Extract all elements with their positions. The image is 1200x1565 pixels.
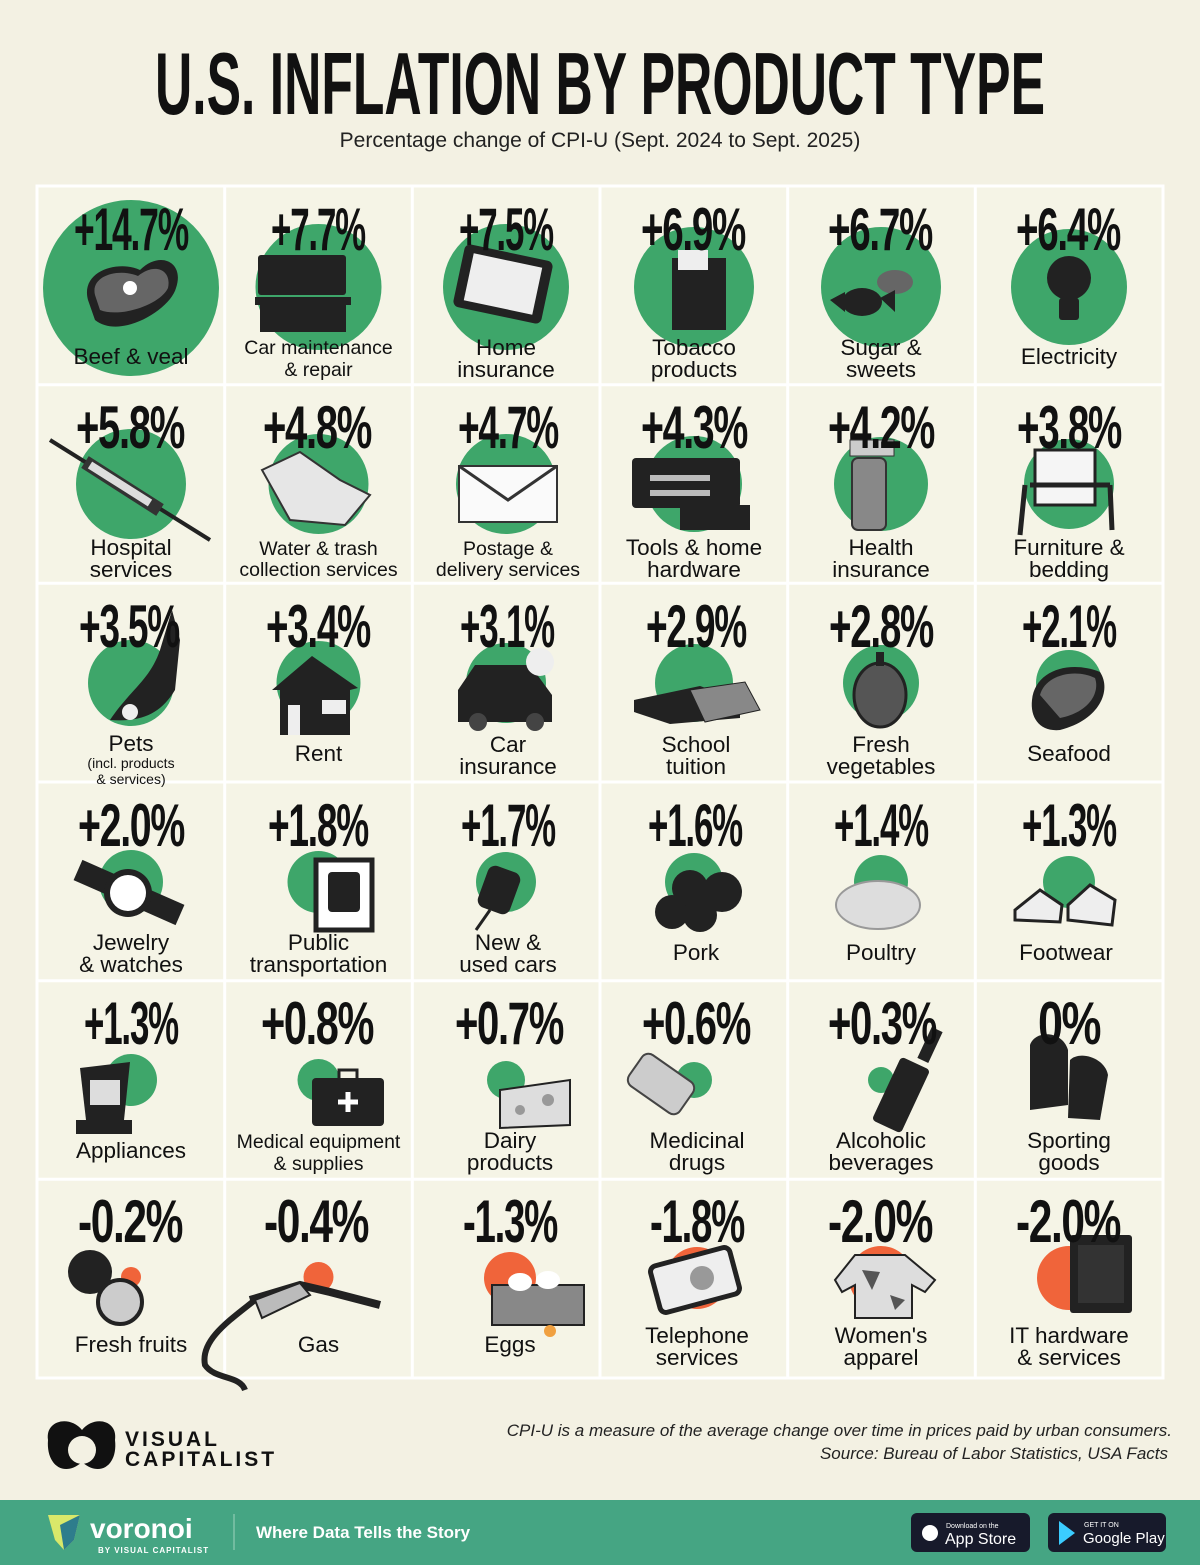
cell: beef & veal: Beef & veal — [73, 344, 189, 369]
logo: visual capitalist: CAPITALIST — [125, 1448, 277, 1471]
footer bar — [0, 1500, 1200, 1565]
cell: new & used cars: +1.7% — [461, 792, 555, 859]
cell: fresh fruits — [68, 1188, 187, 1357]
cell: fresh fruits: Fresh fruits — [75, 1332, 187, 1357]
cell: postage: +4.7% — [458, 394, 558, 461]
cell: pork: +1.6% — [648, 792, 742, 859]
footer bar: GET IT ON — [1084, 1522, 1119, 1529]
cell: alcoholic beverages: Alcoholic — [836, 1128, 926, 1153]
cell: jewelry: +2.0% — [78, 792, 184, 859]
footer bar: Where Data Tells the Story — [256, 1523, 471, 1542]
cell: dairy: Dairy — [484, 1128, 537, 1153]
cell: alcoholic beverages: +0.3% — [828, 990, 936, 1057]
cell: tobacco: +6.9% — [641, 196, 745, 263]
footer bar: Google Play — [1083, 1530, 1165, 1547]
cell: women's apparel — [828, 1188, 935, 1370]
cell: medical equipment — [237, 990, 401, 1175]
cell: public transportation: transportation — [250, 952, 387, 977]
cell: medical equipment: Medical equipment — [237, 1131, 401, 1153]
cell: health insurance: +4.2% — [828, 394, 934, 461]
cell: new & used cars: used cars — [459, 952, 557, 977]
cell: appliances: Appliances — [76, 1138, 186, 1163]
cell: water & trash — [239, 394, 398, 581]
logo: visual capitalist — [48, 1421, 277, 1471]
cell: furniture: bedding — [1029, 557, 1109, 582]
cell: health insurance: insurance — [832, 557, 930, 582]
cell: beef & veal — [43, 196, 219, 376]
cell: jewelry: & watches — [79, 952, 183, 977]
cell: hospital services — [50, 394, 210, 582]
cell: telephone services — [645, 1188, 749, 1370]
cell: health insurance: Health — [848, 535, 914, 560]
cell: school tuition: +2.9% — [646, 593, 746, 660]
cell: car maintenance: Car maintenance — [244, 337, 393, 359]
cell: telephone services: Telephone — [645, 1323, 749, 1348]
grid panel — [37, 186, 1163, 1378]
cell: home insurance — [443, 196, 569, 382]
cell: car insurance — [458, 593, 557, 779]
cell: car insurance: +3.1% — [460, 593, 554, 660]
cell: public transportation: Public — [288, 930, 349, 955]
cell: tobacco: products — [651, 357, 737, 382]
cell: poultry — [834, 792, 928, 965]
cell: tools: Tools & home — [626, 535, 762, 560]
cell: poultry: +1.4% — [834, 792, 928, 859]
cell: sugar & sweets: sweets — [846, 357, 916, 382]
cell: pets: +3.5% — [79, 593, 179, 660]
cell: hospital services: +5.8% — [76, 394, 184, 461]
cell: rent: +3.4% — [266, 593, 370, 660]
cell: home insurance: insurance — [457, 357, 555, 382]
cell: water & trash: +4.8% — [263, 394, 371, 461]
cell: eggs: -1.3% — [463, 1188, 557, 1255]
cell: medicinal drugs: +0.6% — [642, 990, 750, 1057]
cell: car insurance: insurance — [459, 754, 557, 779]
cell: postage — [436, 394, 580, 581]
cell: IT hardware: -2.0% — [1016, 1188, 1120, 1255]
cell: rent: Rent — [295, 741, 343, 766]
cell: seafood: Seafood — [1027, 741, 1111, 766]
cell: pets: & services) — [96, 771, 166, 787]
cell: public transportation — [250, 792, 387, 977]
cell: electricity: +6.4% — [1016, 196, 1120, 263]
cell: IT hardware: IT hardware — [1009, 1323, 1129, 1348]
cell: pets — [79, 593, 180, 787]
cell: tools: +4.3% — [641, 394, 747, 461]
cell: car maintenance: & repair — [284, 359, 353, 381]
cell: car maintenance — [244, 196, 393, 381]
cell: sporting goods: goods — [1038, 1150, 1100, 1175]
cell: seafood: +2.1% — [1022, 593, 1116, 660]
cell: IT hardware — [1009, 1188, 1132, 1370]
cell: medicinal drugs: Medicinal — [649, 1128, 745, 1153]
footnote: Source: Bureau of Labor Statistics, USA Facts — [820, 1444, 1168, 1463]
cell: jewelry: Jewelry — [93, 930, 170, 955]
cell: tobacco: Tobacco — [652, 335, 736, 360]
footer bar: BY VISUAL CAPITALIST — [98, 1546, 209, 1555]
cell: new & used cars: New & — [475, 930, 541, 955]
cell: dairy: products — [467, 1150, 553, 1175]
cell: health insurance — [828, 394, 934, 582]
cell: hospital services: services — [90, 557, 172, 582]
footer bar: App Store — [945, 1531, 1016, 1548]
cell: school tuition: tuition — [666, 754, 726, 779]
cell: electricity — [1011, 196, 1127, 369]
cell: gas: Gas — [298, 1332, 339, 1357]
cell: medical equipment: & supplies — [274, 1153, 364, 1175]
cell: dairy — [455, 990, 570, 1175]
cell: pork: Pork — [673, 940, 720, 965]
cell: home insurance: Home — [476, 335, 536, 360]
cell: eggs: Eggs — [484, 1332, 536, 1357]
cell: car maintenance: +7.7% — [271, 196, 365, 263]
cell: footwear: Footwear — [1019, 940, 1113, 965]
cell: eggs — [463, 1188, 584, 1357]
cell: telephone services: -1.8% — [650, 1188, 744, 1255]
cell: rent — [266, 593, 370, 766]
cell: medical equipment: +0.8% — [261, 990, 373, 1057]
cell: water & trash: collection services — [239, 559, 398, 581]
cell: public transportation: +1.8% — [268, 792, 368, 859]
cell: appliances — [76, 990, 186, 1163]
footer bar: Download on the — [946, 1523, 999, 1530]
cell: poultry: Poultry — [846, 940, 917, 965]
cell: new & used cars — [459, 792, 557, 977]
cell: fresh vegetables — [827, 593, 935, 779]
cell: women's apparel: Women's — [835, 1323, 927, 1348]
cell: pets: Pets — [108, 731, 154, 756]
cell: fresh vegetables: Fresh — [852, 732, 910, 757]
cell: women's apparel: apparel — [843, 1345, 919, 1370]
cell: furniture: Furniture & — [1013, 535, 1125, 560]
logo: visual capitalist: VISUAL — [125, 1428, 220, 1451]
cell: sporting goods: 0% — [1038, 990, 1100, 1057]
cell: sporting goods — [1027, 990, 1111, 1175]
cell: telephone services: services — [656, 1345, 738, 1370]
cell: footwear — [1015, 792, 1116, 965]
cell: IT hardware: & services — [1017, 1345, 1121, 1370]
cell: dairy: +0.7% — [455, 990, 563, 1057]
cell: beef & veal: +14.7% — [74, 196, 188, 263]
cell: alcoholic beverages: beverages — [828, 1150, 934, 1175]
cell: school tuition: School — [662, 732, 730, 757]
cell: tools — [626, 394, 762, 582]
cell: alcoholic beverages — [828, 990, 943, 1175]
cell: gas — [204, 1188, 380, 1390]
cell: gas: -0.4% — [264, 1188, 368, 1255]
cell: hospital services: Hospital — [90, 535, 172, 560]
cell: tobacco — [634, 196, 754, 382]
cell: car insurance: Car — [490, 732, 527, 757]
cell: fresh vegetables: +2.8% — [829, 593, 933, 660]
footer bar: voronoi — [90, 1513, 193, 1544]
cell: sugar & sweets: +6.7% — [828, 196, 932, 263]
cell: pork — [648, 792, 742, 965]
footnote: CPI-U is a measure of the average change over time in prices paid by urban consumers. — [507, 1421, 1172, 1440]
cell: sugar & sweets: Sugar & — [840, 335, 922, 360]
cell: electricity: Electricity — [1021, 344, 1118, 369]
cell: seafood — [1022, 593, 1116, 766]
cell: fresh vegetables: vegetables — [827, 754, 935, 779]
cell: medicinal drugs — [625, 990, 750, 1175]
cell: jewelry — [78, 792, 184, 977]
cell: sugar & sweets — [821, 196, 941, 382]
cell: women's apparel: -2.0% — [828, 1188, 932, 1255]
cell: appliances: +1.3% — [84, 990, 178, 1057]
cell: tools: hardware — [647, 557, 741, 582]
cell: pets: (incl. products — [87, 755, 175, 771]
cell: fresh fruits: -0.2% — [78, 1188, 182, 1255]
cell: medicinal drugs: drugs — [669, 1150, 725, 1175]
cell: postage: delivery services — [436, 559, 580, 581]
cell: home insurance: +7.5% — [459, 196, 553, 263]
cell: water & trash: Water & trash — [259, 538, 378, 560]
cell: postage: Postage & — [463, 538, 553, 560]
subtitle: Percentage change of CPI-U (Sept. 2024 to Sept. 2025) — [340, 129, 860, 152]
cell: footwear: +1.3% — [1022, 792, 1116, 859]
cell: furniture — [1013, 394, 1125, 582]
cell: school tuition — [634, 593, 760, 779]
cell: furniture: +3.8% — [1017, 394, 1121, 461]
cell: sporting goods: Sporting — [1027, 1128, 1111, 1153]
footnote — [507, 1421, 1172, 1463]
